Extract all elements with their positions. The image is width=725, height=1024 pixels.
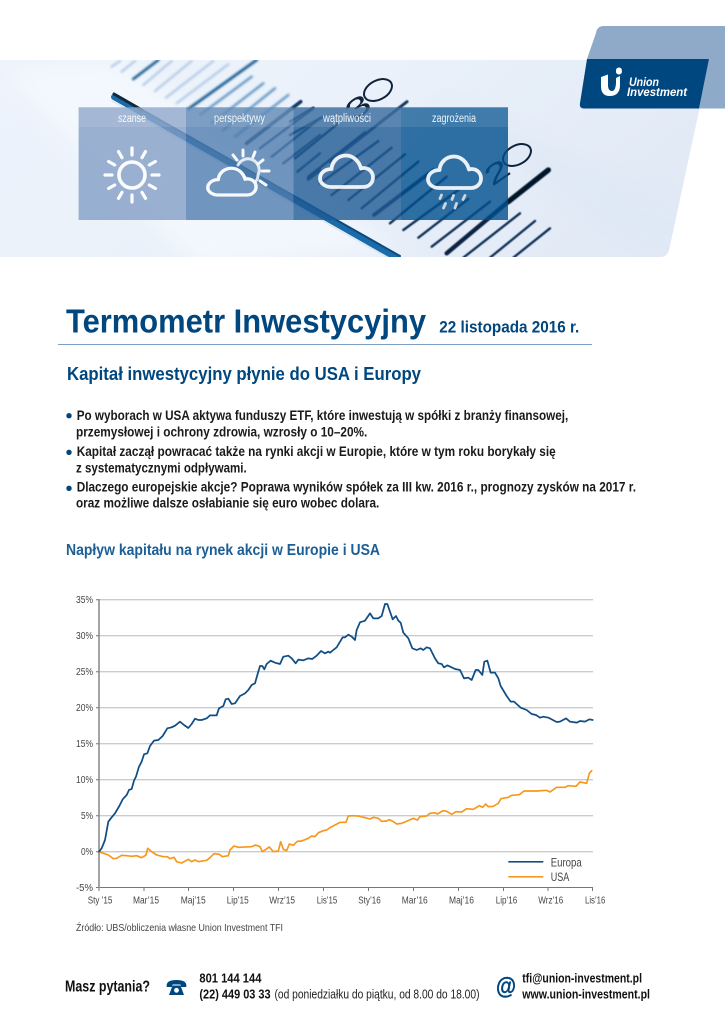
y axis labels: 0% bbox=[81, 847, 93, 858]
source note: Źródło: UBS/obliczenia własne Union Investment TFI bbox=[76, 921, 283, 934]
line chart bbox=[76, 595, 606, 906]
footer: question: Masz pytania? bbox=[65, 979, 150, 996]
y axis labels bbox=[76, 595, 93, 894]
bullet list: oraz możliwe dalsze osłabianie się euro wobec dolara. bbox=[76, 495, 379, 511]
icon: sun behind cloud bbox=[208, 150, 269, 195]
x axis labels: Lis’15 bbox=[317, 895, 338, 906]
chart legend: USA bbox=[551, 870, 569, 884]
bullet list: z systematycznymi odpływami. bbox=[76, 459, 247, 475]
scale digits bbox=[346, 78, 532, 186]
line: USA bbox=[99, 771, 592, 863]
footer: contact links: www.union-investment.pl bbox=[521, 987, 650, 1002]
weather panel: szanse bbox=[79, 107, 186, 220]
bullet list bbox=[66, 407, 636, 511]
scale digits: 2 bbox=[478, 152, 516, 192]
y axis labels: 25% bbox=[76, 667, 93, 678]
icon: telephone bbox=[167, 980, 186, 995]
chart legend: Europa bbox=[551, 856, 582, 870]
line: Europa bbox=[99, 604, 593, 852]
weather panel: perspektywy: perspektywy bbox=[214, 113, 265, 125]
x axis labels: Sty’16 bbox=[358, 895, 381, 906]
weather panel: perspektywy bbox=[186, 107, 293, 220]
logo tab bbox=[580, 26, 725, 108]
weather panel: wątpliwości: wątpliwości bbox=[322, 113, 371, 125]
y axis labels: 20% bbox=[76, 703, 93, 714]
icon: cloud bbox=[320, 156, 373, 187]
y axis labels: 30% bbox=[76, 631, 93, 642]
date: 22 listopada 2016 r. bbox=[439, 319, 579, 337]
scale digits: 3 bbox=[339, 87, 377, 127]
weather panel: wątpliwości bbox=[293, 107, 401, 220]
x axis labels: Lis’16 bbox=[585, 895, 606, 906]
logo text: Investment bbox=[627, 87, 688, 99]
x axis labels: Wrz’15 bbox=[269, 895, 295, 906]
y axis labels: 5% bbox=[81, 811, 93, 822]
logo text: Union bbox=[629, 77, 659, 89]
chart title: Napływ kapitału na rynek akcji w Europie i USA bbox=[66, 542, 380, 559]
icon: sun bbox=[105, 148, 159, 202]
x axis labels: Lip’15 bbox=[227, 895, 249, 906]
weather panel: zagrożenia: zagrożenia bbox=[432, 113, 476, 125]
y axis labels: 35% bbox=[76, 595, 93, 606]
subtitle: Kapitał inwestycyjny płynie do USA i Europy bbox=[67, 364, 421, 384]
footer: contact links bbox=[521, 971, 650, 1002]
thermometer tube bbox=[112, 94, 400, 262]
y axis labels: 10% bbox=[76, 775, 93, 786]
x axis labels bbox=[88, 895, 606, 906]
logo text bbox=[627, 77, 688, 99]
y axis labels: 15% bbox=[76, 739, 93, 750]
weather panel: zagrożenia bbox=[401, 107, 508, 220]
footer: phone numbers: (22) 449 03 33 bbox=[199, 987, 271, 1002]
footer: phone numbers bbox=[199, 971, 480, 1002]
weather panel: szanse: szanse bbox=[118, 113, 146, 125]
header banner: thermometer photo bbox=[0, 60, 725, 270]
bullet list: Po wyborach w USA aktywa funduszy ETF, które inwestują w spółki z branży finansowej, bbox=[77, 407, 568, 423]
x axis labels: Lip’16 bbox=[496, 895, 518, 906]
x axis labels: Mar’15 bbox=[133, 895, 159, 906]
x axis labels: Mar’16 bbox=[402, 895, 428, 906]
icon: rain cloud bbox=[428, 156, 481, 208]
bullet list: przemysłowej i ochrony zdrowia, wzrosły o 10–20%. bbox=[76, 424, 367, 440]
x axis labels: Maj’15 bbox=[181, 895, 206, 906]
icon: at sign: @ bbox=[496, 973, 516, 999]
footer: phone numbers: 801 144 144 bbox=[199, 971, 262, 986]
footer: phone numbers: (od poniedziałku do piątku, od 8.00 do 18.00) bbox=[274, 987, 480, 1002]
x axis labels: Wrz’16 bbox=[538, 895, 564, 906]
footer: contact links: tfi@union-investment.pl bbox=[522, 971, 642, 986]
title: Termometr Inwestycyjny bbox=[66, 303, 427, 340]
bullet list: Kapitał zaczął powracać także na rynki akcji w Europie, które w tym roku borykały się bbox=[77, 443, 556, 459]
logo mark bbox=[601, 67, 622, 96]
x axis labels: Sty ’15 bbox=[88, 895, 113, 906]
y axis labels: -5% bbox=[76, 883, 93, 894]
bullet list: Dlaczego europejskie akcje? Poprawa wyników spółek za III kw. 2016 r., prognozy zysków na 2017 r. bbox=[77, 479, 636, 495]
chart legend bbox=[508, 856, 582, 884]
x axis labels: Maj’16 bbox=[449, 895, 474, 906]
